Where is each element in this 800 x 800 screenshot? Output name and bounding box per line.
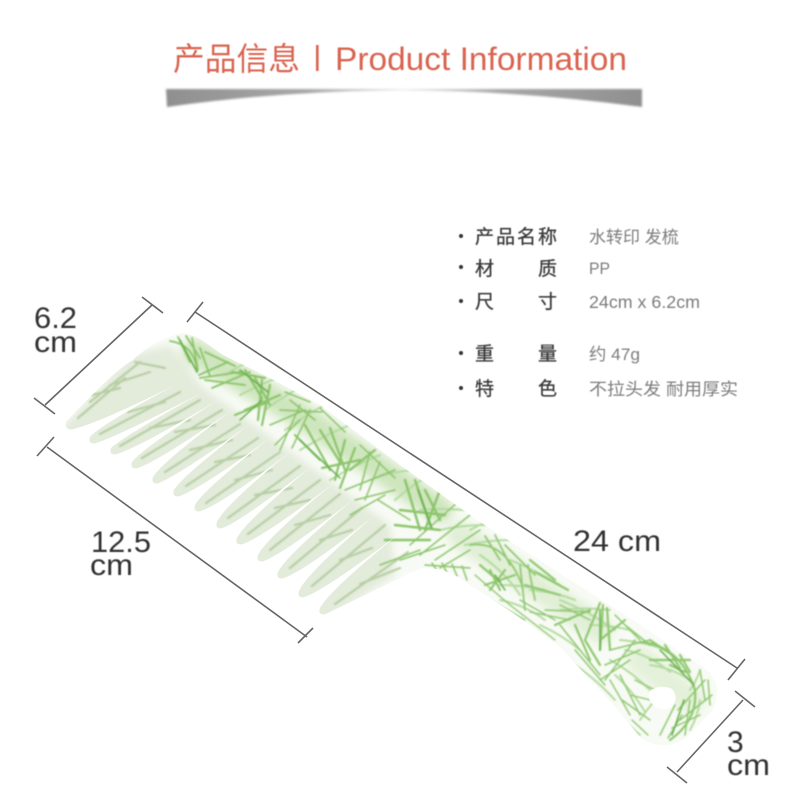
row: weight: 重 [475,343,494,365]
label: 3 cm [727,726,770,782]
leaf print: head band [170,336,480,580]
row: feature: 特 [475,378,494,400]
row: size: 寸 [538,291,557,313]
banner ribbon shadow [166,89,642,107]
label: 6.2 cm: 6.2 [34,302,77,335]
title banner [166,41,642,107]
label: 24 cm: 24 cm [573,525,661,558]
comb hanging hole [649,687,676,709]
row: material: 材 [475,258,494,280]
darker leaf accents [180,340,694,735]
dimension: 6.2 cm [34,297,163,414]
label: 12.5 cm: 12.5 [91,526,151,559]
row: weight: 量 [538,344,557,365]
row: feature [459,378,738,400]
title text: Product Information [335,41,627,77]
row: feature: 色 [538,378,557,400]
title text [173,41,627,77]
label: 3 cm: cm [727,749,770,782]
label: 12.5 cm: cm [90,549,133,582]
row: material [459,258,610,280]
row: product name: 产品名称 [475,226,557,248]
soft green glow along the head and handle [195,352,690,700]
product specification list [459,226,738,400]
comb illustration [66,333,717,745]
row: feature: 不拉头发 耐用厚实 [589,380,738,399]
dimension: 12.5 cm [37,437,313,643]
teeth tint [55,345,395,625]
dimension: 24 cm [187,302,745,680]
row: product name [459,226,679,248]
leaf print: handle [470,535,712,740]
leaf print: light fronds [225,360,700,735]
row: material: 质 [538,258,557,280]
tooth veins [78,362,408,604]
row: size [459,291,700,313]
row: size: 尺 [475,292,494,313]
row: size: 24cm x 6.2cm [589,292,700,312]
label: 3 cm: 3 [727,726,744,759]
title text: 产品信息 [173,41,300,77]
row: material: PP [589,259,610,278]
comb base [152,333,717,745]
row: weight [459,343,640,365]
label: 6.2 cm: cm [34,326,77,359]
label: 12.5 cm [90,526,151,582]
label: 6.2 cm [34,302,77,359]
row: product name: 水转印 发梳 [589,228,679,247]
dimension: 3 cm [667,691,755,783]
row: weight: 约 47g [589,345,640,364]
